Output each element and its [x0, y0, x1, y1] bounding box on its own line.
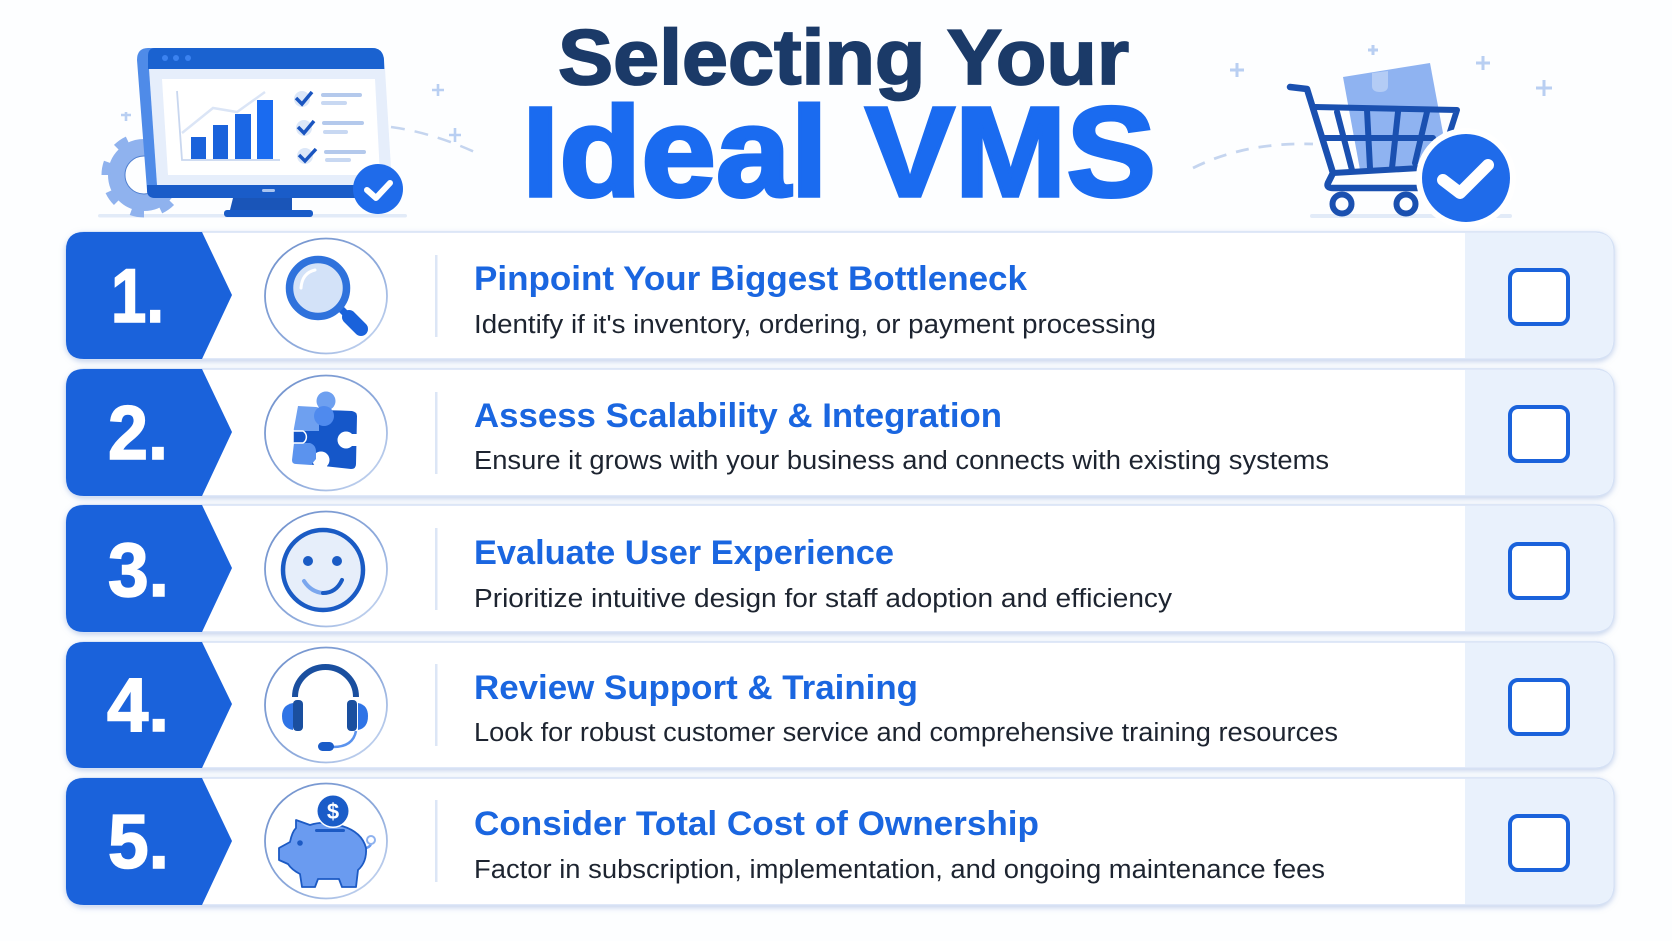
checkbox	[1510, 270, 1568, 324]
number badge	[66, 232, 232, 359]
heading: Pinpoint Your Biggest Bottleneck	[474, 260, 1027, 298]
panel: step 4	[66, 642, 1614, 768]
ground line	[98, 214, 407, 218]
dashed motion path	[391, 127, 481, 155]
heading: Assess Scalability & Integration	[474, 397, 1002, 435]
divider	[435, 392, 438, 474]
panel: step 2	[66, 369, 1614, 496]
icon: check badge	[353, 164, 403, 214]
number badge	[66, 505, 232, 632]
icon: piggy bank with coin	[265, 784, 387, 898]
sparkles	[121, 84, 461, 142]
illustration: monitor dashboard with gear	[98, 48, 481, 218]
monitor frame	[137, 48, 392, 198]
card	[66, 505, 1614, 632]
title line: Selecting Your: Selecting Your	[558, 13, 1129, 101]
panel: step 3	[66, 505, 1614, 632]
description: Look for robust customer service and comprehensive training resources	[474, 719, 1338, 747]
panel: step 1	[66, 232, 1614, 359]
box in cart	[1343, 63, 1443, 170]
sparkles	[1230, 45, 1552, 96]
checkbox column	[1465, 233, 1613, 358]
icon: check badge	[1416, 128, 1516, 228]
description: Identify if it's inventory, ordering, or payment processing	[474, 311, 1156, 339]
title line: Ideal VMS: Ideal VMS	[522, 81, 1156, 224]
checklist	[294, 91, 366, 164]
description: Ensure it grows with your business and connects with existing systems	[474, 447, 1329, 475]
icon: headset	[265, 648, 387, 762]
number badge	[66, 778, 232, 905]
checkbox column	[1465, 779, 1613, 904]
checkbox	[1510, 544, 1568, 598]
number: 4.	[107, 663, 169, 748]
description: Prioritize intuitive design for staff adoption and efficiency	[474, 585, 1172, 613]
checkbox column	[1465, 643, 1613, 767]
heading: Consider Total Cost of Ownership	[474, 805, 1039, 843]
checkbox	[1510, 680, 1568, 734]
number: 1.	[111, 254, 164, 339]
checkbox	[1510, 407, 1568, 461]
divider	[435, 255, 438, 337]
number: 5.	[108, 800, 169, 885]
cart	[1290, 87, 1457, 214]
checkbox column	[1465, 506, 1613, 631]
title	[522, 13, 1156, 224]
panel: step 5	[66, 778, 1614, 905]
number: 2.	[108, 391, 168, 476]
bar chart	[177, 91, 280, 160]
ground line	[1310, 214, 1512, 218]
monitor screen	[149, 69, 392, 185]
heading: Review Support & Training	[474, 669, 918, 707]
heading: Evaluate User Experience	[474, 534, 894, 572]
dashed motion path	[1193, 144, 1313, 168]
number: 3.	[108, 528, 169, 613]
number badge	[66, 642, 232, 768]
icon: gear	[106, 137, 182, 213]
card	[66, 369, 1614, 496]
card	[66, 778, 1614, 905]
card	[66, 232, 1614, 359]
icon: magnifying glass	[265, 238, 387, 354]
icon: smiley face	[265, 512, 387, 626]
checkbox column	[1465, 370, 1613, 495]
monitor base bar and stand	[147, 185, 392, 198]
description: Factor in subscription, implementation, and ongoing maintenance fees	[474, 856, 1325, 884]
icon: puzzle piece	[265, 376, 387, 490]
checkbox	[1510, 816, 1568, 870]
divider	[435, 528, 438, 610]
illustration: shopping cart with check	[1193, 45, 1552, 228]
icon: piggy bank with coin: $	[327, 799, 339, 824]
divider	[435, 800, 438, 882]
divider	[435, 664, 438, 746]
card	[66, 642, 1614, 768]
number badge	[66, 369, 232, 496]
